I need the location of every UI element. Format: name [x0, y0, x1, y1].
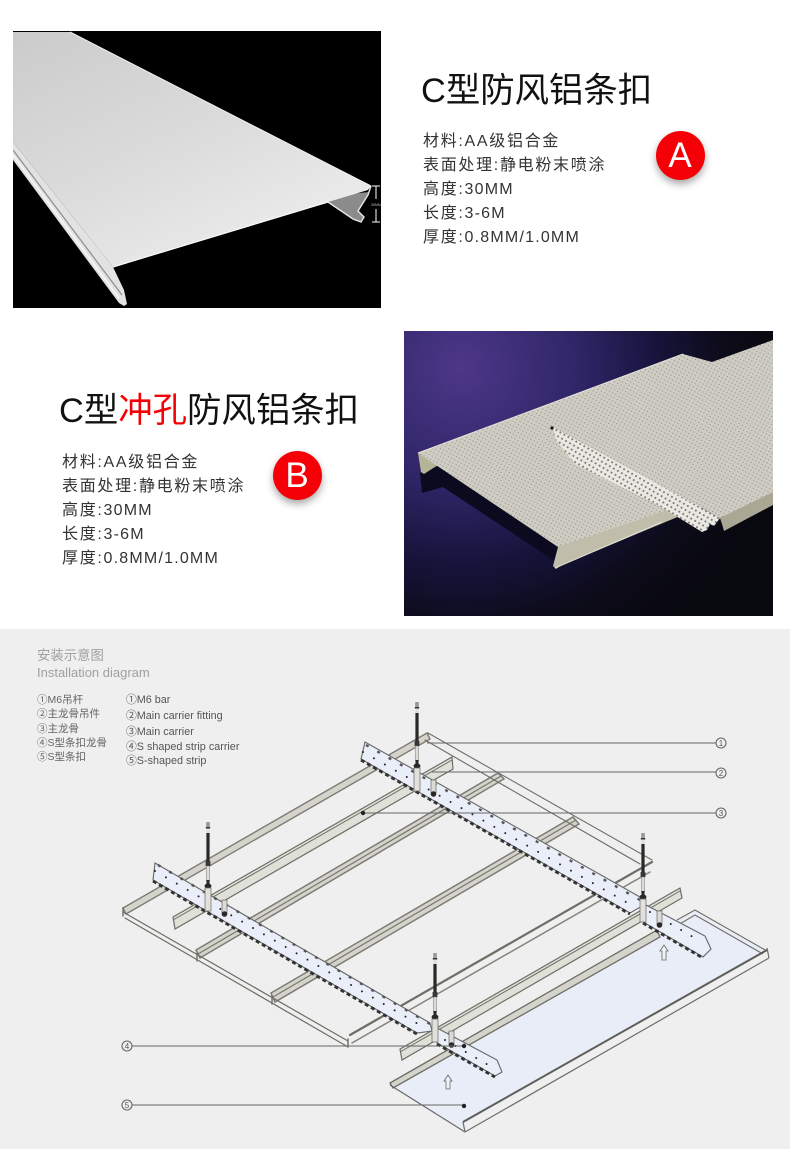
spec list A — [423, 132, 606, 246]
main carrier lower — [400, 888, 682, 1060]
spec list B: 材料:AA级铝合金 — [62, 454, 199, 471]
legend: Chinese: ①M6吊杆 — [37, 694, 83, 706]
legend: English: ⑤S-shaped strip — [126, 755, 206, 767]
spec list A: 长度:3-6M — [423, 205, 506, 222]
legend: English: ③Main carrier — [126, 726, 194, 738]
legend: Chinese: ②主龙骨吊件 — [37, 708, 100, 720]
hanger rods — [205, 702, 662, 1048]
spec list B — [62, 453, 245, 567]
spec list B: 长度:3-6M — [62, 526, 145, 543]
spec list A: 厚度:0.8MM/1.0MM — [423, 229, 580, 246]
legend: Chinese: ⑤S型条扣 — [37, 751, 86, 763]
badge A: A — [668, 136, 692, 174]
main carrier upper — [173, 757, 453, 929]
legend: Chinese — [37, 694, 107, 763]
strip carrier stub top right — [643, 905, 711, 958]
leader ③ — [361, 808, 726, 818]
legend: English — [126, 694, 240, 767]
leader ①: 1 — [719, 739, 724, 748]
peeled flap of perforated strip — [553, 427, 720, 532]
leader ④: 4 — [125, 1042, 130, 1051]
badge A — [656, 130, 704, 180]
leader ① — [427, 738, 726, 748]
legend: English: ④S shaped strip carrier — [126, 741, 239, 753]
legend: Chinese: ④S型条扣龙骨 — [37, 737, 107, 749]
photo: white C-shaped aluminium strip: 30MM — [371, 203, 381, 207]
spec list A: 表面处理:静电粉末喷涂 — [423, 157, 606, 174]
spec list A: 材料:AA级铝合金 — [423, 133, 560, 150]
strip rails behind the carriers — [123, 733, 652, 1047]
heading: C型防风铝条扣: C型防风铝条扣 — [421, 72, 652, 110]
heading: C型冲孔防风铝条扣: C型冲孔防风铝条扣 — [59, 392, 359, 430]
diagram heading — [37, 648, 150, 680]
panel: installation diagram — [0, 629, 790, 1149]
legend: Chinese: ③主龙骨 — [37, 723, 79, 735]
legend: English: ②Main carrier fitting — [126, 710, 223, 722]
diagram heading: Installation diagram — [37, 665, 150, 680]
leader ④ — [122, 1041, 466, 1051]
photo: white C-shaped aluminium strip — [13, 31, 381, 308]
strip carrier lower — [153, 863, 432, 1034]
ceiling assembly drawing — [121, 702, 770, 1132]
leader ⑤ — [122, 1100, 466, 1110]
spec list B: 表面处理:静电粉末喷涂 — [62, 478, 245, 495]
spec list B: 高度:30MM — [62, 502, 153, 519]
leader ②: 2 — [719, 769, 724, 778]
badge B: B — [285, 456, 309, 494]
leader ③: 3 — [719, 809, 724, 818]
badge B — [272, 450, 322, 500]
leader ② — [432, 768, 726, 778]
legend: English: ①M6 bar — [126, 694, 170, 706]
strip carrier stub bottom right — [437, 1028, 502, 1077]
photo: perforated aluminium strips on purple background — [404, 331, 773, 616]
spec list A: 高度:30MM — [423, 181, 514, 198]
diagram heading: 安装示意图 — [37, 648, 104, 663]
strip carrier upper — [361, 742, 642, 914]
S-shaped strip panel with arrows — [390, 910, 769, 1132]
leader ⑤: 5 — [125, 1101, 130, 1110]
spec list B: 厚度:0.8MM/1.0MM — [62, 550, 219, 567]
